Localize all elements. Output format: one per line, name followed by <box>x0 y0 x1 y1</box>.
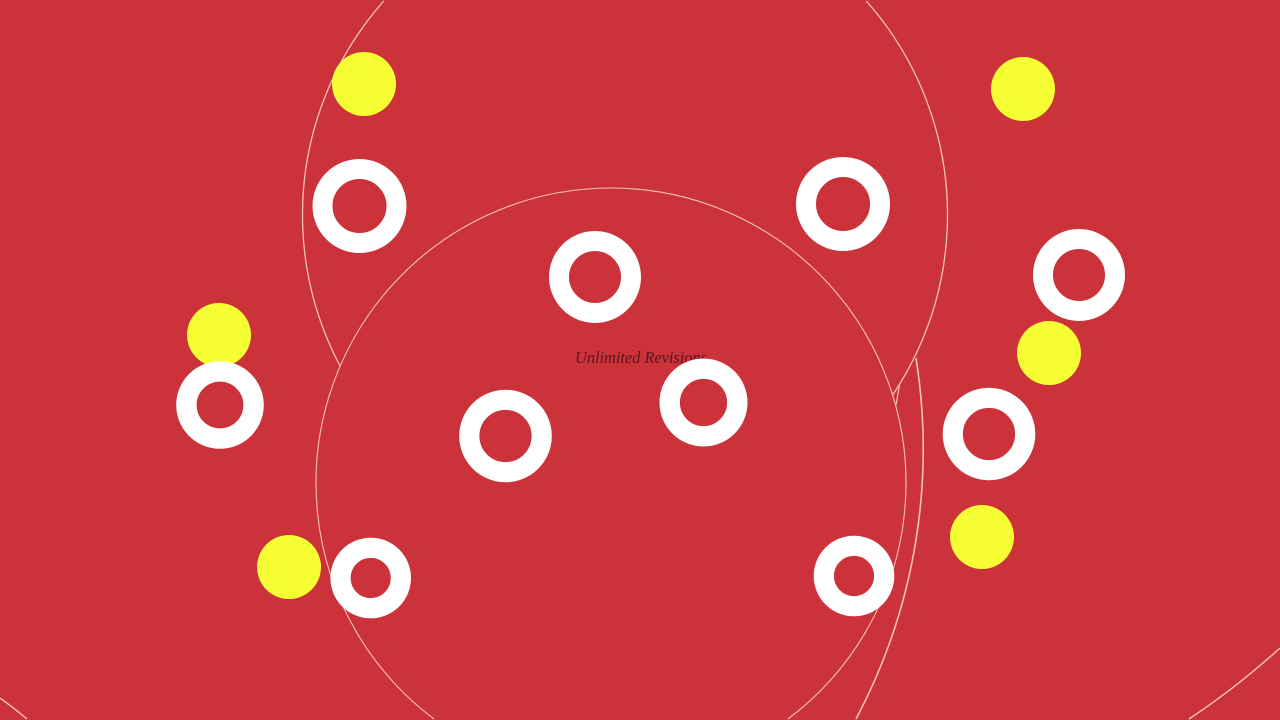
outline arc: right circle <box>856 358 923 719</box>
caption: Unlimited Revisions <box>575 348 707 367</box>
white rings <box>186 167 1115 608</box>
outline arcs: large outer circle <box>0 648 1280 719</box>
yellow dots <box>187 52 1081 599</box>
outline circle: centre <box>316 188 906 720</box>
outline stub: right junction <box>896 385 900 405</box>
outline circle: top <box>302 0 948 537</box>
